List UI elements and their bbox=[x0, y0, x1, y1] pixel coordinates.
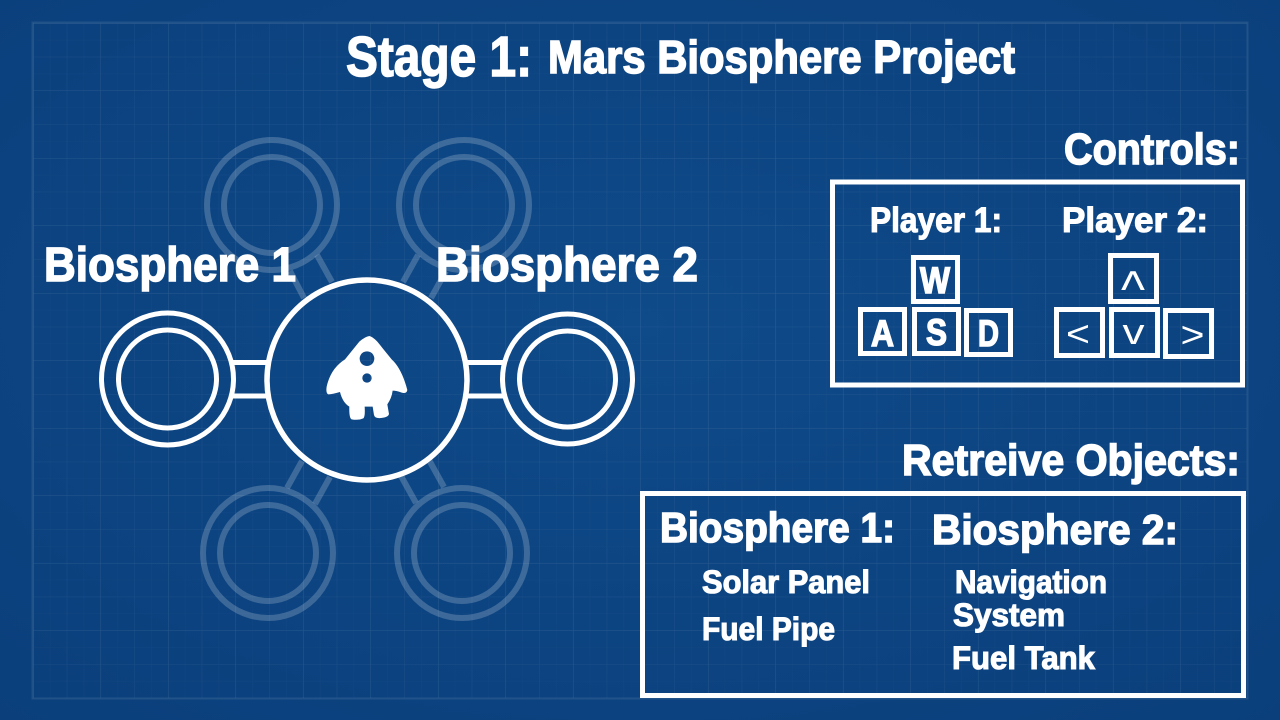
key right bbox=[1166, 310, 1212, 356]
icon: rocket bbox=[326, 336, 407, 420]
biosphere 2 list heading: Biosphere 2: bbox=[932, 506, 1178, 553]
biosphere 1 list heading: Biosphere 1: bbox=[660, 504, 895, 551]
item: fuel pipe: Fuel Pipe bbox=[702, 611, 835, 647]
heading: retreive objects: Retreive Objects: bbox=[902, 436, 1240, 485]
locked biosphere bottom left bbox=[203, 461, 333, 618]
key right: > bbox=[1180, 314, 1204, 355]
item: navigation system bbox=[953, 564, 1107, 633]
panel: controls bbox=[832, 182, 1242, 385]
key up bbox=[1110, 256, 1156, 318]
item: navigation system: System bbox=[953, 597, 1065, 633]
title: Mars Biosphere Project bbox=[548, 31, 1015, 83]
key A: A bbox=[871, 313, 894, 354]
key left: < bbox=[1066, 313, 1090, 354]
key left bbox=[1056, 310, 1102, 356]
title bbox=[346, 25, 1015, 89]
key D bbox=[966, 310, 1010, 354]
key W: W bbox=[920, 260, 950, 301]
key S: S bbox=[926, 312, 947, 353]
item: fuel tank: Fuel Tank bbox=[952, 640, 1095, 676]
biosphere 2 node bbox=[466, 314, 632, 444]
locked biosphere top left bbox=[207, 140, 337, 298]
item: navigation system: Navigation bbox=[955, 564, 1107, 600]
player 2 heading: Player 2: bbox=[1062, 201, 1208, 240]
label: biosphere 2: Biosphere 2 bbox=[436, 239, 698, 292]
key S bbox=[914, 310, 958, 354]
key down bbox=[1112, 310, 1158, 356]
locked biosphere bottom right bbox=[397, 460, 527, 618]
heading: controls: Controls: bbox=[1064, 125, 1240, 174]
panel: retreive objects bbox=[642, 494, 1244, 696]
key down: v bbox=[1122, 311, 1144, 352]
key D: D bbox=[978, 313, 999, 354]
locked biospheres bbox=[203, 140, 529, 618]
key A bbox=[860, 310, 904, 354]
label: biosphere 1: Biosphere 1 bbox=[44, 239, 296, 292]
central hub bbox=[267, 280, 467, 480]
title: Stage 1: bbox=[346, 25, 532, 89]
locked biosphere top right bbox=[399, 140, 529, 298]
key up: ^ bbox=[1121, 260, 1145, 318]
item: solar panel: Solar Panel bbox=[702, 564, 870, 600]
biosphere 1 node bbox=[102, 313, 268, 445]
player 1 heading: Player 1: bbox=[870, 201, 1002, 240]
